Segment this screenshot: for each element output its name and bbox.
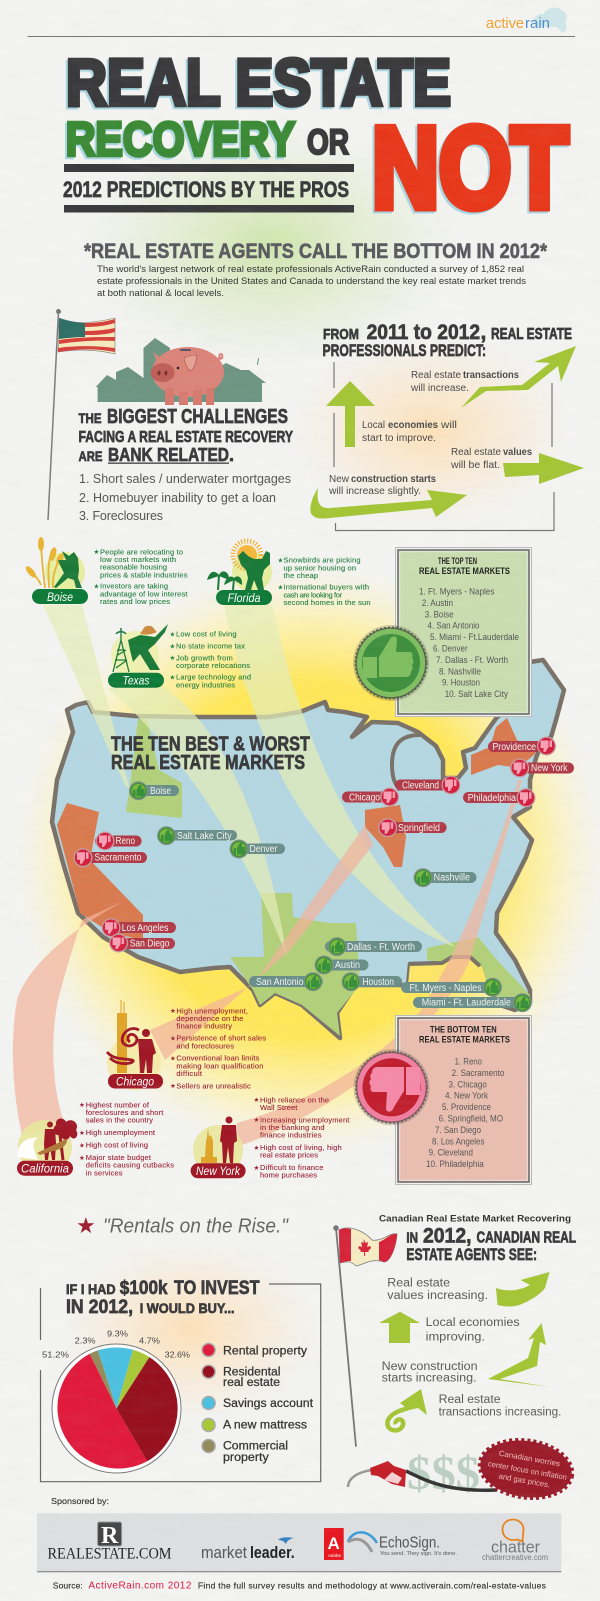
marker: Reno: [95, 832, 142, 850]
marker: Los Angeles: Los Angeles: [122, 923, 168, 934]
pie values: [42, 1329, 190, 1360]
marker: Salt Lake City: [157, 826, 237, 845]
panel: Texas: ★: [170, 654, 176, 662]
prediction labels: New: [329, 474, 350, 485]
callout: Canadian worries burst: [477, 1435, 575, 1503]
logo: activerain: active: [486, 15, 524, 32]
badge: thumbs down: [354, 1049, 430, 1125]
heading: in 2012 Canadian agents see: [406, 1225, 576, 1264]
logo: RealEstate.com: [48, 1522, 172, 1562]
panel: top ten list: [396, 548, 532, 716]
panel: investment pie chart: [40, 1278, 321, 1482]
panel: bottom ten list: 2. Sacramento: [452, 1068, 504, 1079]
panel: New York: New York: [196, 1164, 241, 1178]
arrow: transactions up: [461, 346, 576, 408]
subtitle with rules: [63, 164, 354, 212]
panel: New York: Wall Street: [260, 1103, 298, 1112]
map labels: worst markets: [74, 736, 574, 952]
panel: Florida: Snowbirds are picking: [284, 556, 360, 565]
prediction labels: Local: [362, 420, 385, 431]
panel: Boise: Investors are taking: [100, 582, 168, 591]
logo: activerain: [486, 7, 567, 33]
panel: Chicago: Sellers are unrealistic: [176, 1081, 251, 1090]
panel: Boise: advantage of low interest: [100, 589, 188, 598]
panel: Chicago: High unemployment,: [176, 1006, 248, 1015]
panel: New York: Increasing unemployment: [260, 1115, 350, 1124]
source line: Source:: [53, 1580, 83, 1590]
illustration: gas pump and dollars: $$$: [407, 1447, 480, 1500]
panel: bottom ten list: 6. Springfield, MO: [439, 1113, 503, 1124]
pie legend: Savings account: [223, 1398, 314, 1410]
marker: Denver: Denver: [250, 844, 278, 855]
prediction labels: start to improve.: [362, 433, 436, 444]
heading: from 2011 to 2012: [322, 321, 572, 360]
panel: Texas: ★: [170, 674, 176, 682]
panel: New York: High cost of living, high: [260, 1143, 342, 1152]
icon: houses and piggy bank: [96, 338, 266, 405]
map labels: best markets: [129, 781, 532, 1012]
rentals callout: "Rentals on the Rise.": [103, 1216, 289, 1238]
list of challenges: 2. Homebuyer inability to get a loan: [79, 491, 276, 505]
map of the United States: [52, 660, 564, 1038]
panel: New York: ★: [254, 1164, 260, 1172]
pie values: 2.3%: [75, 1335, 96, 1345]
region: Florida: [427, 937, 530, 1008]
title: REAL ESTATE: [64, 48, 449, 121]
marker: Boise: Boise: [150, 786, 171, 797]
panel: California: foreclosures and short: [86, 1108, 164, 1117]
prediction labels: will increase.: [410, 383, 469, 394]
pie legend: A new mattress: [223, 1420, 307, 1432]
panel: California: Major state budget: [86, 1153, 152, 1162]
marker: Springfield: [378, 818, 447, 837]
pie legend: real estate: [223, 1377, 280, 1389]
marker: Houston: Houston: [362, 977, 394, 988]
panel: top ten list: 7. Dallas - Ft. Worth: [436, 655, 508, 666]
map title: REAL ESTATE MARKETS: [111, 752, 305, 774]
prediction labels: will be flat.: [450, 460, 500, 471]
background colour glows: [15, 125, 600, 1420]
panel: Chicago: [107, 1000, 266, 1090]
marker: Cleveland: Cleveland: [402, 780, 439, 791]
subtitle with rules: 2012 PREDICTIONS BY THE PROS: [63, 177, 349, 202]
Canadian prediction labels: starts increasing.: [382, 1373, 477, 1385]
beams linking best markets: [43, 605, 455, 957]
arrow: values increasing: [496, 1272, 550, 1306]
prediction labels: values: [503, 447, 532, 458]
Canadian prediction labels: New construction: [382, 1361, 478, 1373]
panel: Texas: energy industries: [176, 680, 235, 689]
marker: Dallas: Dallas - Ft. Worth: [347, 942, 415, 953]
marker: Providence: Providence: [492, 742, 536, 753]
panel: California: sales in the country: [86, 1116, 153, 1125]
panel: bottom ten list: REAL ESTATE MARKETS: [419, 1034, 510, 1045]
marker: San Diego: San Diego: [130, 939, 170, 950]
logo: Adobe: Adobe: [328, 1553, 342, 1558]
marker: Miami: Miami - Ft. Lauderdale: [422, 998, 511, 1009]
panel: Florida: International buyers with: [284, 583, 369, 592]
panel: Chicago: difficult: [176, 1069, 203, 1078]
panel: Texas: ★: [170, 630, 176, 638]
region: California: [57, 803, 143, 940]
pie legend: property: [223, 1452, 269, 1464]
panel: Boise: prices & stable industries: [100, 570, 188, 579]
panel: bottom ten list: 4. New York: [445, 1091, 488, 1102]
source line: ActiveRain.com 2012: [88, 1580, 192, 1591]
title: [64, 46, 568, 234]
marker: Reno: Reno: [116, 836, 135, 847]
pie: [52, 1344, 181, 1473]
panel: bottom ten list: 1. Reno: [455, 1057, 482, 1068]
panel: Boise: [24, 537, 188, 606]
panel: Texas: Low cost of living: [176, 630, 236, 639]
intro paragraph: estate professionals in the United States and Canada to understand the key real estate market trends: [97, 276, 526, 286]
pie legend: [202, 1344, 314, 1464]
arrow: economies improving: [379, 1312, 420, 1343]
marker: Salt Lake City: Salt Lake City: [177, 831, 232, 842]
map title: [111, 734, 310, 774]
logo: EchoSign: [348, 1532, 457, 1557]
logo: market leader: leader.: [250, 1543, 295, 1562]
marker: San Antonio: San Antonio: [256, 977, 304, 988]
logo: chatter: [482, 1520, 548, 1562]
heading: Canadian market: Canadian Real Estate Market Recovering: [379, 1214, 571, 1225]
panel: bottom ten list: [396, 1016, 532, 1184]
region: Illinois: [365, 805, 406, 867]
marker: Houston: [342, 972, 402, 991]
logo: RealEstate.com: REALESTATE.COM: [48, 1545, 172, 1562]
panel: California: deficits causing cutbacks: [86, 1161, 174, 1170]
marker: Miami: [413, 993, 532, 1012]
panel: Chicago: ★: [170, 1007, 176, 1015]
heading: biggest challenges: FACING A REAL ESTATE RECOVERY: [78, 429, 294, 446]
logo: Adobe: [324, 1528, 344, 1560]
panel: Texas: [108, 624, 251, 689]
panel: top ten list: 10. Salt Lake City: [445, 689, 508, 700]
list of challenges: 3. Foreclosures: [79, 509, 163, 523]
heading: biggest challenges: THE: [78, 410, 102, 426]
heading: if I had $100k: I WOULD BUY...: [140, 1300, 235, 1316]
heading: in 2012 Canadian agents see: 2012,: [423, 1225, 472, 1248]
logo: EchoSign: You send. They sign. It's done.: [380, 1551, 457, 1557]
panel: Chicago: making loan qualification: [176, 1061, 263, 1070]
panel: Florida: the cheap: [284, 571, 318, 580]
heading: from 2011 to 2012: 2011 to 2012: [367, 321, 480, 344]
arrow: transactions curl: [387, 1389, 427, 1430]
heading: biggest challenges: ARE: [78, 448, 102, 464]
heading: if I had $100k: $100k: [120, 1278, 168, 1299]
panel: Chicago: ★: [170, 1054, 176, 1062]
heading: if I had $100k: TO INVEST: [174, 1278, 260, 1299]
logo: activerain: rain: [525, 15, 550, 32]
arrow: construction slightly up: [310, 488, 467, 519]
panel: top ten list: 2. Austin: [422, 598, 453, 609]
logo: EchoSign: EchoSign.: [379, 1535, 440, 1552]
heading: in 2012 Canadian agents see: ESTATE AGENTS SEE:: [406, 1246, 537, 1264]
marker: Providence: [488, 736, 556, 756]
panel: California: California: [21, 1162, 69, 1176]
heading: from 2011 to 2012: REAL ESTATE: [491, 326, 572, 343]
panel: Boise: reasonable housing: [100, 563, 167, 572]
logo: market leader: market: [201, 1543, 247, 1562]
logo: Adobe: A: [328, 1534, 340, 1553]
prediction labels: will increase slightly.: [328, 486, 421, 497]
panel: Texas: Texas: [122, 674, 150, 688]
panel: bottom ten list: 8. Los Angeles: [432, 1136, 485, 1147]
panel: top ten list: 5. Miami - Ft.Lauderdale: [430, 632, 519, 643]
heading: if I had $100k: [66, 1278, 260, 1318]
marker: Sacramento: [74, 848, 147, 867]
marker: Chicago: [342, 788, 399, 806]
prediction labels: will: [440, 420, 457, 431]
panel: top ten list: THE TOP TEN: [438, 556, 477, 566]
arrow: construction zigzag: [488, 1323, 550, 1387]
panel: Texas: No state income tax: [176, 642, 245, 651]
marker: Nashville: Nashville: [434, 873, 470, 884]
panel: California: ★: [79, 1154, 85, 1162]
intro paragraph: [97, 264, 526, 298]
panel: New York: in the banking and: [260, 1123, 324, 1132]
panel: California: High cost of living: [86, 1141, 148, 1150]
arrow: values flat: [503, 453, 584, 484]
panel: top ten list: 4. San Antonio: [428, 621, 480, 632]
icon: Canadian flag on pole: [333, 1225, 397, 1447]
panel: California: [17, 1100, 174, 1177]
heading: biggest challenges: BIGGEST CHALLENGES: [107, 406, 288, 428]
callout: Canadian worries burst: and gas prices.: [498, 1472, 551, 1489]
Canadian prediction labels: transactions increasing.: [439, 1407, 561, 1419]
panel: California: ★: [79, 1129, 85, 1137]
marker: San Diego: [109, 934, 175, 952]
logo: chatter: chatter: [491, 1538, 540, 1557]
marker: Austin: [314, 956, 368, 974]
Canadian prediction labels: [382, 1278, 561, 1419]
panel: Texas: Job growth from: [176, 653, 233, 662]
panel: Chicago: ★: [170, 1034, 176, 1042]
Canadian prediction labels: values increasing.: [387, 1290, 488, 1302]
list of challenges: 1. Short sales / underwater mortgages: [79, 472, 291, 486]
marker: Springfield: Springfield: [398, 823, 440, 834]
illustration: gas pump and dollars: [348, 1447, 497, 1500]
logo: chatter: chattercreative.com: [482, 1553, 548, 1562]
list of challenges: [79, 472, 291, 523]
panel: Boise: low cost markets with: [100, 555, 176, 564]
region: Idaho: [126, 719, 182, 818]
region: New York: [471, 718, 536, 775]
beams linking worst markets: [13, 780, 522, 1147]
panel: Boise: People are relocating to: [100, 547, 183, 556]
panel: Chicago: Conventional loan limits: [176, 1054, 260, 1063]
panel: Florida: up senior housing on: [284, 563, 356, 572]
pie values: 9.3%: [107, 1329, 128, 1339]
heading: from 2011 to 2012: FROM: [323, 326, 359, 343]
panel: top ten list: 1. Ft. Myers - Naples: [419, 587, 495, 598]
Canadian prediction labels: Local economies: [426, 1317, 520, 1329]
prediction labels: [328, 370, 532, 497]
pie legend: Commercial: [223, 1441, 288, 1453]
marker: Nashville: [414, 868, 476, 887]
title: RECOVERY: [64, 115, 293, 168]
panel: bottom ten list: THE BOTTOM TEN: [430, 1025, 497, 1035]
pie legend: Rental property: [223, 1345, 307, 1357]
marker: Philadelphia: Philadelphia: [468, 793, 516, 804]
panel: Florida: [207, 541, 370, 607]
marker: Ft. Myers: Ft. Myers - Naples: [410, 983, 482, 994]
panel: top ten list: 3. Boise: [425, 609, 454, 620]
region: Texas: [230, 893, 360, 1036]
marker: Sacramento: Sacramento: [94, 853, 142, 864]
prediction labels: economies: [388, 420, 438, 431]
marker: San Antonio: [249, 972, 323, 991]
panel: New York: real estate prices: [260, 1151, 318, 1160]
marker: Austin: Austin: [335, 960, 360, 971]
panel: Texas: corporate relocations: [176, 661, 250, 670]
panel: top ten list: 8. Nashville: [439, 666, 481, 677]
panel: New York: [191, 1095, 350, 1180]
heading: if I had $100k: IN 2012,: [66, 1297, 133, 1318]
panel: New York: finance industries: [260, 1131, 322, 1140]
heading: biggest challenges: .: [229, 445, 234, 465]
pie values: 32.6%: [165, 1350, 190, 1360]
rentals callout: ★: [76, 1213, 96, 1238]
title: RECOVERY: [66, 113, 295, 166]
panel: New York: home purchases: [260, 1171, 317, 1180]
panel frame: predictions: [334, 362, 554, 530]
pie values: 4.7%: [139, 1335, 160, 1345]
marker: New York: [510, 758, 574, 778]
panel: Texas: ★: [170, 642, 176, 650]
marker: Los Angeles: [102, 918, 176, 937]
panel: bottom ten list: 10. Philadelphia: [426, 1159, 484, 1170]
panel: Chicago: finance industry: [176, 1022, 232, 1031]
panel: Florida: Florida: [228, 591, 261, 605]
title: OR: [307, 123, 349, 162]
panel: Chicago: and foreclosures: [176, 1041, 234, 1050]
marker: Boise: [129, 781, 179, 800]
panel: New York: Difficult to finance: [260, 1163, 323, 1172]
panel: top ten list: 9. Houston: [442, 678, 480, 689]
marker: Cleveland: [395, 776, 460, 794]
panel: bottom ten list: 7. San Diego: [435, 1125, 481, 1136]
panel: California: High unemployment: [86, 1128, 156, 1137]
callout: Canadian worries burst: center focus on inflation: [487, 1459, 568, 1482]
heading: if I had $100k: IF I HAD: [66, 1281, 116, 1297]
panel: Florida: ★: [278, 556, 284, 564]
panel: Boise: ★: [94, 582, 100, 590]
panel: bottom ten list: 3. Chicago: [448, 1079, 487, 1090]
marker: New York: New York: [531, 763, 568, 774]
source line: [53, 1580, 546, 1591]
prediction labels: transactions: [463, 370, 519, 381]
panel: Chicago: Persistence of short sales: [176, 1034, 266, 1043]
panel: bottom ten list: 5. Providence: [442, 1102, 491, 1113]
panel: Florida: ★: [278, 584, 284, 592]
source line: Find the full survey results and methodology at www.activerain.com/real-estate-values: [198, 1580, 546, 1590]
panel: Boise: Boise: [47, 590, 73, 604]
icon: US flag on pole: [48, 309, 115, 520]
panel: Chicago: ★: [170, 1082, 176, 1090]
prediction labels: construction starts: [351, 474, 436, 485]
logo: market leader: [201, 1537, 295, 1562]
marker: Chicago: Chicago: [349, 793, 380, 804]
panel: top ten list: 6. Denver: [433, 644, 468, 655]
panel: Florida: cash are looking for: [284, 590, 342, 599]
panel: Chicago: Chicago: [116, 1074, 154, 1088]
marker: Ft. Myers: [401, 978, 502, 997]
Canadian prediction labels: improving.: [426, 1332, 485, 1344]
logo: RealEstate.com: R: [101, 1523, 119, 1549]
panel: Chicago: dependence on the: [176, 1014, 243, 1023]
panel: California: ★: [79, 1142, 85, 1150]
prediction labels: Real estate: [411, 370, 461, 381]
heading: in 2012 Canadian agents see: IN: [406, 1230, 418, 1247]
panel: New York: ★: [254, 1116, 260, 1124]
Canadian prediction labels: Real estate: [439, 1394, 501, 1406]
panel: California: ★: [79, 1101, 85, 1109]
panel: New York: ★: [254, 1144, 260, 1152]
panel: top ten list: REAL ESTATE MARKETS: [419, 566, 510, 577]
badge: thumbs up: [353, 625, 429, 701]
panel: Texas: Large technology and: [176, 673, 251, 682]
sponsors band: [37, 1513, 561, 1572]
heading: from 2011 to 2012: PROFESSIONALS PREDICT:: [322, 342, 486, 360]
intro paragraph: The world's largest network of real estate professionals ActiveRain conducted a survey of 1,852 real: [97, 264, 524, 274]
panel: California: in services: [86, 1168, 123, 1177]
panel: New York: High reliance on the: [260, 1095, 329, 1104]
sponsors label: Sponsored by:: [51, 1496, 109, 1506]
heading: biggest challenges: [78, 406, 294, 465]
marker: Denver: [230, 840, 285, 858]
pie values: 51.2%: [42, 1350, 69, 1360]
arrow: local economies up: [326, 381, 375, 447]
pie legend: Residental: [223, 1366, 280, 1378]
marker: Dallas: [325, 937, 422, 956]
heading: biggest challenges: BANK RELATED: [108, 445, 229, 465]
map title: THE TEN BEST & WORST: [111, 734, 310, 756]
heading: from 2011 to 2012: ,: [480, 321, 486, 344]
panel: bottom ten list: 9. Cleveland: [429, 1148, 473, 1159]
title: REAL ESTATE: [66, 46, 451, 119]
Canadian prediction labels: Real estate: [387, 1278, 450, 1290]
panel: Boise: rates and low prices: [100, 597, 170, 606]
intro paragraph: at both national & local levels.: [97, 288, 224, 298]
panel: Boise: ★: [94, 548, 100, 556]
panel: Florida: second homes in the sun: [284, 598, 370, 607]
panel: California: Highest number of: [86, 1100, 150, 1109]
marker: Philadelphia: [463, 788, 536, 807]
panel: New York: ★: [254, 1096, 260, 1104]
prediction labels: Real estate: [451, 447, 501, 458]
callout: Canadian worries burst: Canadian worries: [498, 1449, 561, 1468]
